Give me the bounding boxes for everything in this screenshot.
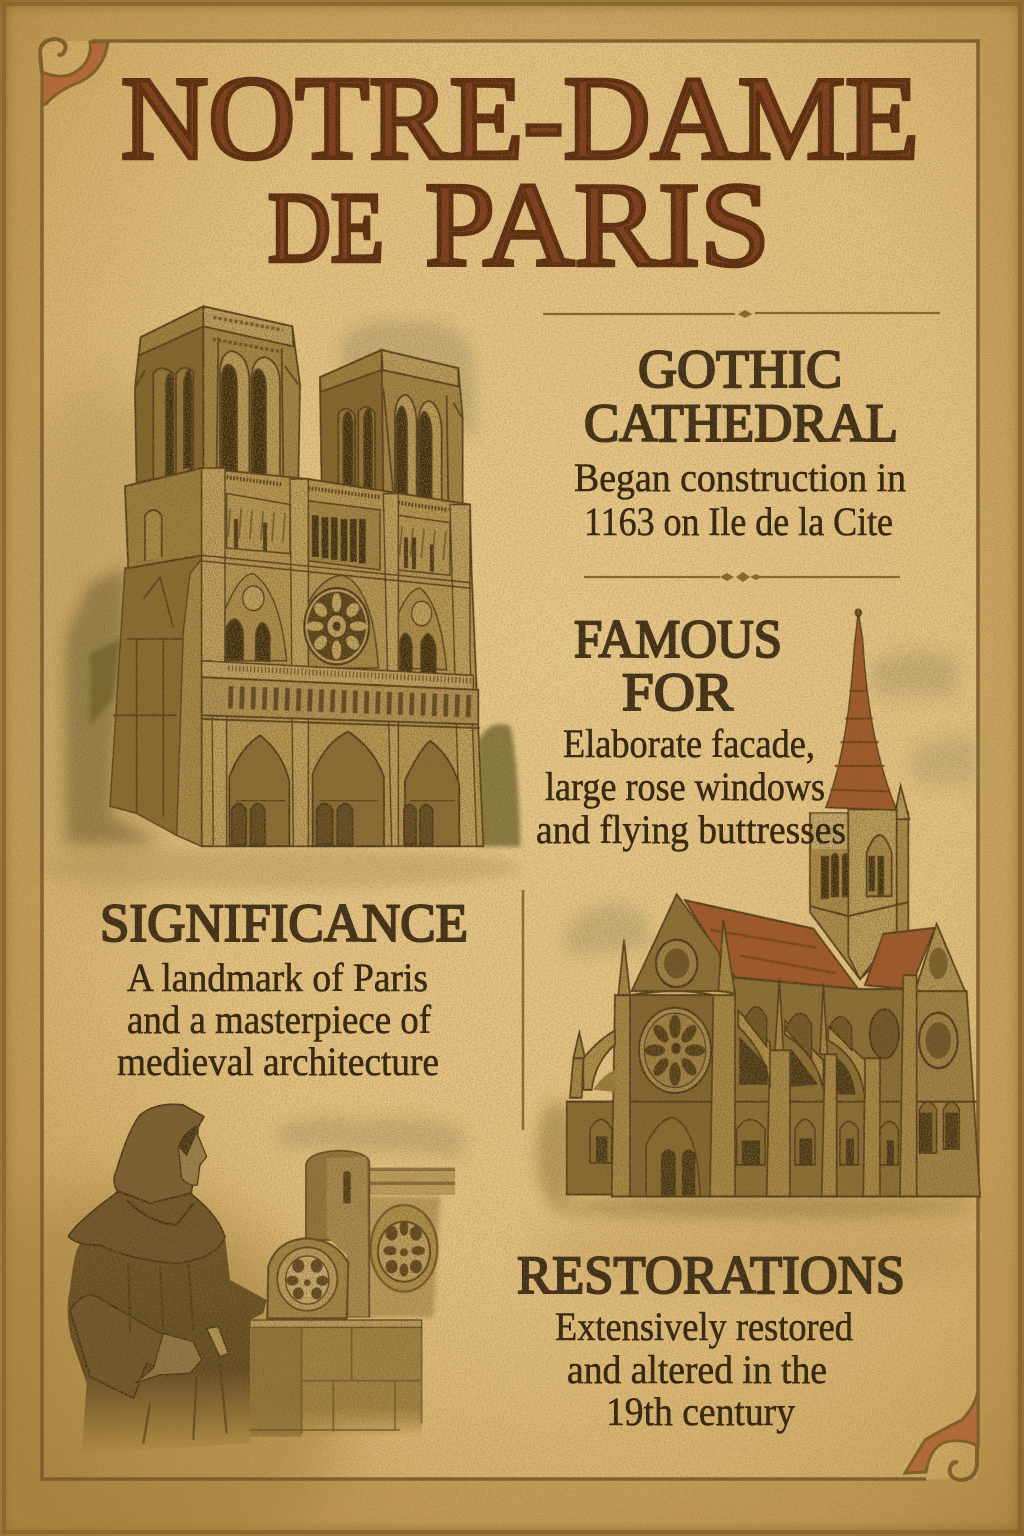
text block: Significance: SIGNIFICANCE	[100, 893, 468, 953]
text block: Gothic Cathedral: 1163 on Ile de la Cite	[584, 499, 893, 544]
portals	[229, 732, 459, 846]
bell tower	[810, 786, 909, 979]
corner ornament: top left	[40, 39, 108, 105]
roofs	[685, 900, 935, 989]
title: PARIS	[425, 158, 770, 291]
carved window stone	[267, 1238, 348, 1318]
text block: Restorations: 19th century	[606, 1389, 795, 1434]
illustration: Notre-Dame facade	[67, 306, 520, 846]
title: DE	[268, 172, 384, 283]
illustration: hooded monk and stonework	[68, 1104, 463, 1453]
text block: Gothic Cathedral: GOTHIC	[638, 339, 842, 399]
text block: Gothic Cathedral: CATHEDRAL	[584, 393, 898, 453]
text block: Famous For: and flying buttresses	[536, 807, 846, 852]
vertical divider	[522, 890, 524, 1130]
sky wash	[537, 651, 977, 1217]
text block: Restorations: Extensively restored	[555, 1304, 853, 1349]
balcony	[202, 661, 480, 728]
monk figure	[68, 1104, 267, 1453]
buttresses	[202, 468, 477, 846]
text block: Restorations	[517, 1245, 905, 1434]
text block: Restorations: and altered in the	[567, 1347, 827, 1392]
divider: middle right	[584, 572, 900, 582]
text block: Famous For: large rose windows	[545, 764, 825, 809]
rose windows	[639, 940, 958, 1093]
side wing	[110, 555, 203, 846]
corner ornament: bottom right	[905, 1390, 978, 1480]
text block: Famous For	[536, 609, 846, 852]
left tower	[135, 306, 300, 483]
arched windows	[590, 1007, 959, 1196]
text block: Significance: and a masterpiece of	[127, 997, 432, 1042]
divider: upper right	[543, 310, 940, 318]
text block: Significance: A landmark of Paris	[127, 955, 428, 1000]
flying buttresses	[583, 1011, 865, 1098]
main walls	[567, 894, 980, 1196]
title	[121, 52, 919, 291]
stone pedestal	[250, 1320, 422, 1437]
text block: Famous For: FAMOUS	[574, 609, 782, 669]
text block: Famous For: Elaborate facade,	[563, 721, 815, 766]
stone pillar	[306, 1151, 369, 1317]
stone wall with rose window	[277, 1116, 463, 1317]
text block: Significance	[100, 893, 468, 1084]
title: NOTRE-DAME	[121, 52, 919, 184]
text block: Famous For: FOR	[622, 662, 733, 722]
main front	[125, 468, 483, 846]
sky wash and foliage	[67, 321, 520, 846]
illustration: side-view church	[537, 609, 980, 1217]
text block: Significance: medieval architecture	[117, 1039, 439, 1084]
spire	[826, 609, 897, 810]
right tower	[320, 350, 463, 504]
upper gallery	[202, 477, 470, 588]
rose window	[304, 575, 378, 668]
text block: Restorations: RESTORATIONS	[517, 1245, 905, 1305]
text block: Gothic Cathedral	[574, 339, 906, 544]
text block: Gothic Cathedral: Began construction in	[574, 455, 906, 500]
side lancets and tracery	[225, 574, 447, 673]
